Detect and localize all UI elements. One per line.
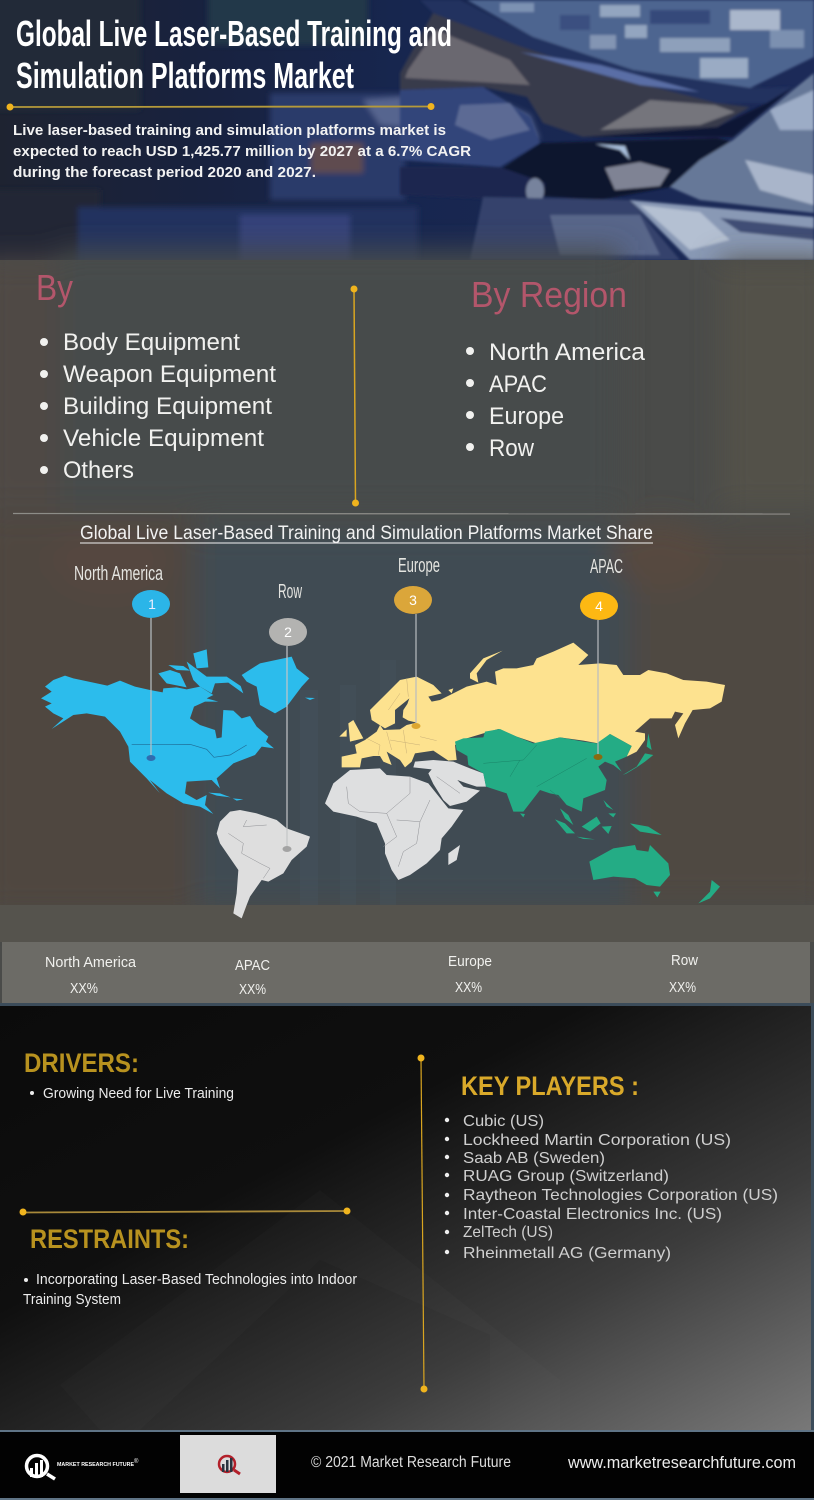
share: Row: XX%: [669, 979, 696, 996]
key players list: Lockheed Martin Corporation (US): [463, 1132, 731, 1149]
map pin 1: North America: 1: [148, 596, 156, 612]
heading: drivers: DRIVERS:: [24, 1048, 139, 1078]
chart title: Global Live Laser-Based Training and Simulation Platforms Market Share: [80, 523, 653, 544]
footer: grey logo tile: [180, 1435, 276, 1493]
vertical gold divider: [350, 286, 359, 506]
hero banner photo: soldier: [0, 0, 814, 270]
heading: key players: KEY PLAYERS :: [461, 1071, 639, 1101]
list: equipment segments: Others: [63, 457, 134, 484]
key players list: [445, 1113, 778, 1262]
footer: white logo: MARKET RESEARCH FUTURE: [57, 1462, 134, 1468]
dark panel: drivers, restraints, key players: [0, 1003, 814, 1432]
map pin 2: Row: [269, 618, 307, 852]
list: equipment segments: Weapon Equipment: [63, 361, 276, 388]
key players list: Raytheon Technologies Corporation (US): [463, 1187, 778, 1204]
map: europe and russia: [339, 643, 725, 767]
list: regions: Europe: [489, 403, 564, 430]
map pin 3: Europe: [394, 586, 432, 729]
restraint item: Incorporating Laser-Based Technologies into Indoor: [36, 1271, 357, 1288]
heading: restraints: RESTRAINTS:: [30, 1224, 189, 1254]
share: Row: [669, 952, 698, 996]
list: regions: Row: [489, 435, 535, 462]
restraint item: [23, 1271, 357, 1308]
map pin 1: North America: [132, 590, 170, 761]
map label: APAC: APAC: [590, 556, 623, 578]
key players list: Cubic (US): [463, 1113, 544, 1130]
share values strip: [2, 942, 810, 1003]
share: Europe: Europe: [448, 953, 492, 970]
map label: North America: North America: [74, 563, 164, 585]
driver item: Growing Need for Live Training: [43, 1085, 234, 1102]
list: equipment segments: Vehicle Equipment: [63, 425, 264, 452]
hero description: [13, 122, 471, 181]
gold divider: drivers and restraints: [20, 1208, 350, 1216]
share: APAC: XX%: [239, 981, 266, 998]
segment heading: By: By: [36, 267, 73, 308]
hero title: Global Live Laser-Based Training and: [16, 13, 452, 54]
segment heading: By Region: By Region: [471, 274, 627, 315]
share: APAC: APAC: [235, 957, 270, 974]
hero title: Simulation Platforms Market: [16, 55, 354, 96]
footer: white logo: ®: [134, 1458, 139, 1465]
gold divider: vertical: [418, 1054, 428, 1392]
map: asia pacific: [455, 729, 720, 903]
key players list: Saab AB (Sweden): [463, 1150, 605, 1167]
map pin 2: Row: 2: [284, 624, 292, 640]
share: North America: [45, 954, 137, 997]
list: equipment segments: [40, 329, 276, 484]
share: North America: XX%: [70, 980, 98, 997]
footer: white logo: [26, 1456, 139, 1479]
hero description: during the forecast period 2020 and 2027.: [13, 164, 316, 181]
key players list: Inter-Coastal Electronics Inc. (US): [463, 1206, 722, 1223]
map label: Europe: Europe: [398, 555, 440, 577]
world map: [41, 643, 725, 918]
map: south america: [217, 810, 310, 918]
share: APAC: [235, 957, 270, 998]
list: regions: North America: [489, 339, 646, 366]
list: equipment segments: Body Equipment: [63, 329, 240, 356]
middle section background: [0, 250, 814, 1005]
hero gold rule: [6, 103, 434, 110]
footer bar: [0, 1432, 814, 1500]
map pin 4: APAC: [580, 592, 618, 760]
footer: website: www.marketresearchfuture.com: [567, 1454, 796, 1472]
share: Row: Row: [671, 952, 698, 969]
horizontal section rule: [13, 512, 790, 515]
map label: Row: Row: [278, 581, 302, 603]
map: africa and middle east: [325, 760, 486, 880]
hero description: expected to reach USD 1,425.77 million by 2027 at a 6.7% CAGR: [13, 143, 471, 160]
restraint item: Training System: [23, 1291, 121, 1308]
map: north america: [41, 649, 315, 814]
hero title: [16, 13, 452, 96]
key players list: Rheinmetall AG (Germany): [463, 1245, 671, 1262]
map pin 4: APAC: 4: [595, 598, 603, 614]
list: equipment segments: Building Equipment: [63, 393, 272, 420]
share: Europe: [448, 953, 492, 996]
share: North America: North America: [45, 954, 137, 971]
map pin 3: Europe: 3: [409, 592, 417, 608]
hero description: Live laser-based training and simulation platforms market is: [13, 122, 446, 139]
list: regions: APAC: [489, 371, 547, 398]
list: regions: [466, 339, 646, 462]
footer: copyright: © 2021 Market Research Future: [311, 1454, 511, 1471]
key players list: ZelTech (US): [463, 1224, 553, 1241]
key players list: RUAG Group (Switzerland): [463, 1168, 669, 1185]
share: Europe: XX%: [455, 979, 482, 996]
